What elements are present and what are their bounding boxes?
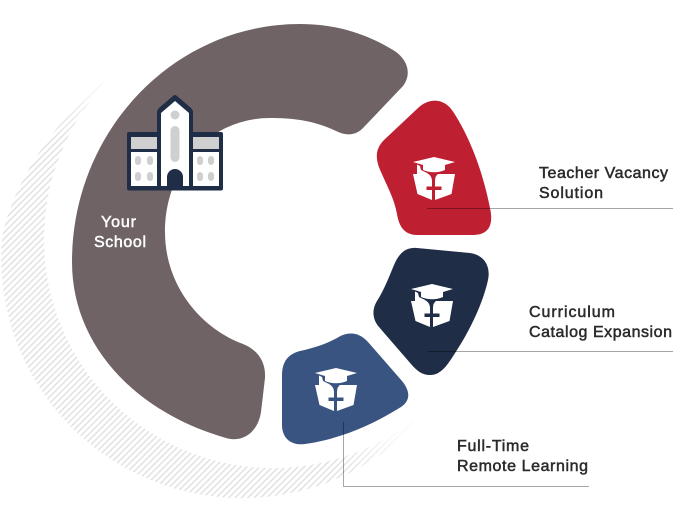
icon: graduation cap and book (411, 284, 453, 327)
icon: graduation cap and book (413, 157, 455, 200)
label: full-time remote learning: Remote Learning (457, 458, 588, 475)
large C-shaped ring: your school (72, 24, 408, 439)
label: your school: Your (101, 214, 137, 231)
label: teacher vacancy solution: Solution (539, 185, 603, 202)
panel: teacher vacancy blob (377, 101, 491, 235)
connector line: remote learning (344, 422, 589, 486)
connector line: curriculum catalog (428, 350, 673, 352)
icon: graduation cap and book (315, 368, 357, 411)
label: full-time remote learning: Full-Time (457, 438, 529, 455)
label: teacher vacancy solution: Teacher Vacancy (539, 165, 668, 182)
label: curriculum catalog expansion: Catalog Expansion (529, 324, 672, 341)
label: curriculum catalog expansion: Curriculum (529, 304, 615, 321)
connector line: teacher vacancy (427, 208, 673, 210)
label: your school: School (94, 234, 146, 251)
hatched background crescent (1, 90, 393, 498)
icon: school building (127, 95, 223, 190)
panel: curriculum catalog blob (373, 248, 489, 375)
panel: remote learning blob (282, 333, 408, 444)
